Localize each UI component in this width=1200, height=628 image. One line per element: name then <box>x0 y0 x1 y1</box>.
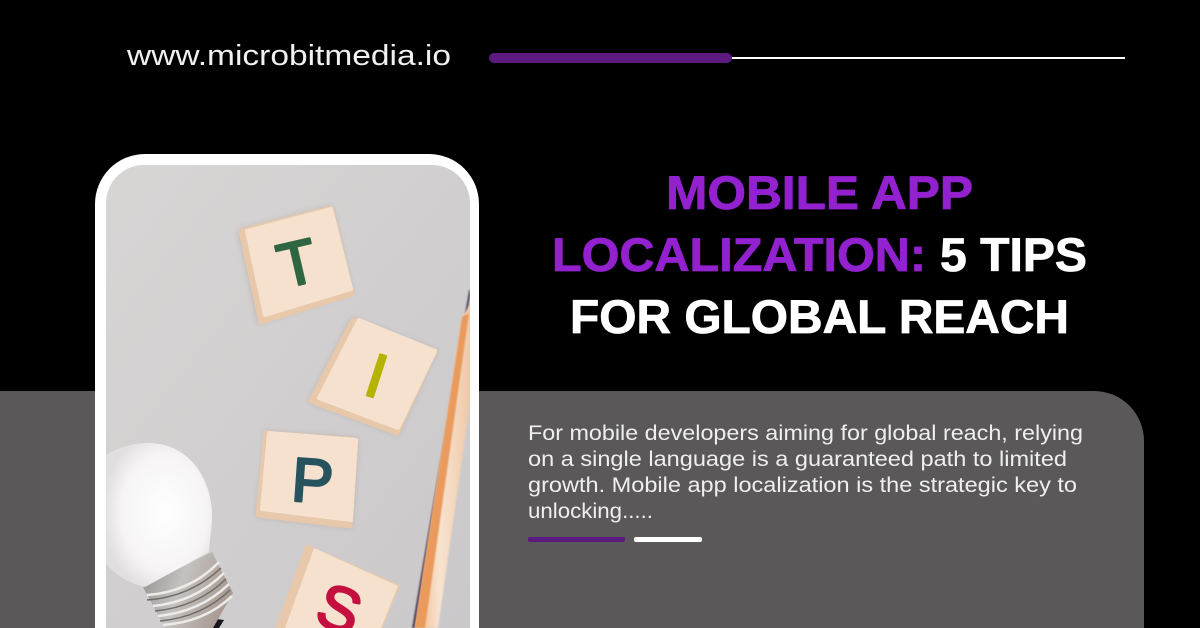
block S <box>277 546 398 628</box>
title: 5 TIPS <box>940 228 1087 281</box>
block T: T <box>271 226 324 302</box>
white card frame <box>95 154 479 628</box>
intro paragraph: unlocking..... <box>528 500 653 523</box>
grey lower panel <box>0 391 1144 628</box>
block P: P <box>289 446 335 517</box>
pencil <box>412 290 470 628</box>
website address: www.microbitmedia.io <box>126 40 451 72</box>
paragraph accent bars <box>528 537 702 542</box>
title: LOCALIZATION: <box>552 228 926 281</box>
intro paragraph: growth. Mobile app localization is the strategic key to <box>528 474 1077 497</box>
intro paragraph: For mobile developers aiming for global reach, relying <box>528 422 1083 445</box>
title <box>552 166 1087 343</box>
intro paragraph: on a single language is a guaranteed path to limited <box>528 448 1067 471</box>
block I <box>308 317 437 435</box>
block T <box>238 206 353 324</box>
intro paragraph <box>528 422 1083 523</box>
photo: tips blocks, bulb and pencil <box>106 165 470 628</box>
block I: I <box>357 341 395 412</box>
block P <box>256 431 358 528</box>
title: FOR GLOBAL REACH <box>570 290 1069 343</box>
light bulb <box>106 443 233 628</box>
title: MOBILE APP <box>666 166 973 219</box>
photo card <box>95 154 479 628</box>
header rule <box>489 53 1125 63</box>
